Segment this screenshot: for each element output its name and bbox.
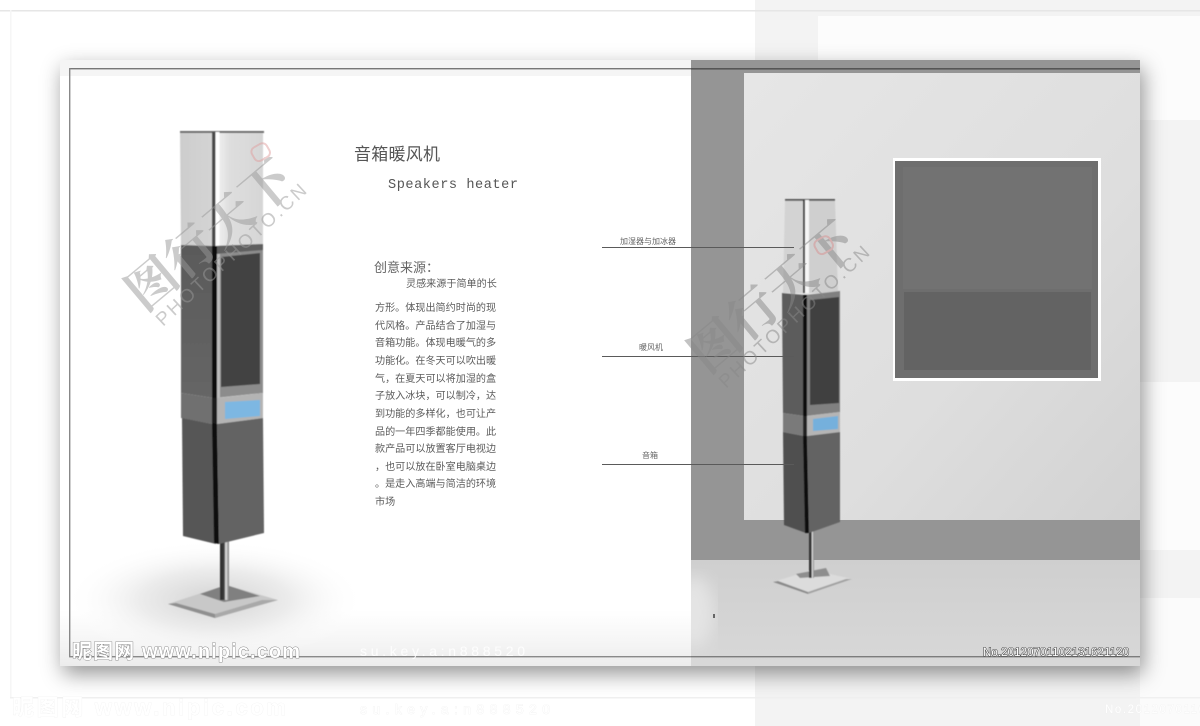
- heading: 创意来源：: [374, 260, 439, 275]
- heater section: [782, 291, 840, 416]
- glass upper chamber: [180, 131, 264, 246]
- control band with LCD: [783, 412, 840, 436]
- body copy: 代风格。产品结合了加湿与: [375, 319, 496, 332]
- panel: right room scene: [674, 60, 1140, 666]
- pole: [220, 540, 229, 600]
- callout: humidifier and ice: 加湿器与加冰器: [620, 236, 676, 246]
- control band with LCD: [181, 393, 263, 424]
- base: [773, 568, 852, 594]
- speaker section: [783, 432, 840, 533]
- base: [168, 585, 278, 618]
- watermark: left: PHOTOPHOTO.CN: [152, 180, 311, 331]
- panel: left white page: [60, 60, 691, 666]
- body copy: 。是走入高端与简洁的环境: [375, 477, 496, 490]
- author mark: su.key.a:n888520: [360, 643, 525, 659]
- heater section: [181, 244, 263, 398]
- ghost watermark row: 昵图网 www.nipic.com: [12, 695, 286, 720]
- title: 音箱暖风机: [354, 145, 440, 164]
- glass upper chamber: [783, 199, 838, 293]
- body copy: 音箱功能。体现电暖气的多: [375, 336, 496, 349]
- body copy: 子放入冰块，可以制冷，达: [375, 389, 496, 402]
- pole: [809, 530, 814, 578]
- text block: inspiration: [374, 260, 497, 508]
- body copy: 到功能的多样化，也可让产: [375, 407, 496, 420]
- body copy: 灵感来源于简单的长: [406, 277, 497, 290]
- body copy: 品的一年四季都能使用。此: [375, 425, 496, 438]
- watermark: right: 图行天下: [670, 202, 871, 386]
- callout: speaker: 音箱: [642, 450, 658, 460]
- body copy: 方形。体现出简约时尚的现: [375, 301, 496, 314]
- speaker section: [182, 418, 264, 544]
- ghost watermark row: su.key.a:n888520: [360, 701, 550, 717]
- painting on the wall: [893, 158, 1101, 381]
- body copy: 款产品可以放置客厅电视边: [375, 442, 496, 455]
- product: left speaker heater tower: [168, 131, 278, 618]
- source mark: nipic: 昵图网 www.nipic.com: [72, 641, 300, 663]
- ghost watermark row: [12, 695, 1200, 720]
- product: tower in room scene: [773, 199, 852, 594]
- body copy: 气，在夏天可以将加湿的盒: [375, 372, 496, 385]
- subtitle: Speakers heater: [388, 178, 518, 193]
- body copy: 功能化。在冬天可以吹出暖: [375, 354, 496, 367]
- watermark: left: 图行天下: [107, 140, 308, 324]
- watermark: right: PHOTOPHOTO.CN: [715, 242, 874, 393]
- body copy: 市场: [375, 495, 395, 508]
- body copy: ，也可以放在卧室电脑桌边: [375, 460, 496, 473]
- callout: fan heater: 暖风机: [639, 342, 663, 352]
- panel shadow: [60, 60, 1140, 666]
- image number: No.20120701102131621120: [983, 647, 1129, 659]
- body copy: [375, 277, 497, 508]
